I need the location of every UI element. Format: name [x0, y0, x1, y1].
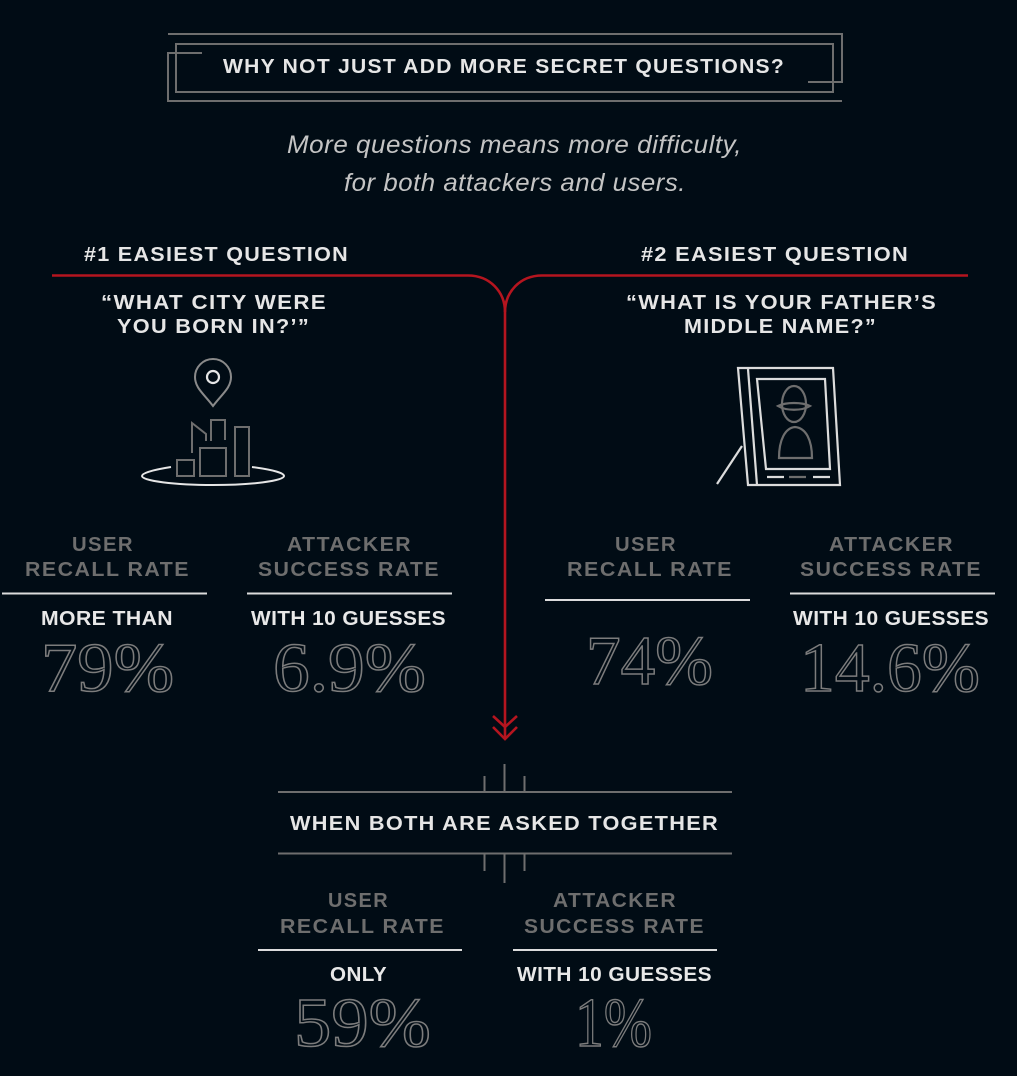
icon: picture frame portrait [717, 368, 840, 485]
stat: attacker success rate 14.6%: WITH 10 GUESSES [793, 608, 989, 630]
stat: attacker success rate 1% [513, 890, 717, 1061]
header banner [168, 34, 842, 101]
red branching arrow [52, 276, 968, 739]
subtitle: More questions means more difficulty, [287, 131, 742, 159]
stat: attacker success rate 1%: SUCCESS RATE [524, 916, 705, 938]
panel: easiest question 2 [545, 244, 995, 707]
stat: user recall rate 79% [2, 534, 207, 707]
stat: user recall rate 59%: ONLY [330, 964, 387, 986]
stat: user recall rate 79%: RECALL RATE [25, 559, 190, 581]
question: father's middle name [626, 292, 937, 338]
stat: attacker success rate 1%: 1% [575, 984, 652, 1061]
heading: #1 easiest question: #1 EASIEST QUESTION [84, 244, 349, 266]
title: WHY NOT JUST ADD MORE SECRET QUESTIONS? [223, 56, 785, 78]
stat: attacker success rate 1%: ATTACKER [553, 890, 677, 912]
subtitle: for both attackers and users. [344, 169, 686, 197]
stat: user recall rate 79%: MORE THAN [41, 608, 173, 630]
stat: user recall rate 74%: USER [615, 534, 677, 556]
stat: attacker success rate 6.9% [247, 534, 452, 707]
stat: attacker success rate 14.6%: ATTACKER [829, 534, 954, 556]
question: father's middle name: MIDDLE NAME?” [684, 316, 877, 338]
panel: both questions together [258, 764, 732, 1061]
stat: attacker success rate 1%: WITH 10 GUESSES [517, 964, 712, 986]
icon: map pin over city [142, 359, 284, 485]
question: city born in: “WHAT CITY WERE [101, 292, 327, 314]
stat: attacker success rate 14.6%: SUCCESS RATE [800, 559, 982, 581]
question: city born in: YOU BORN IN?’” [117, 316, 310, 338]
stat: user recall rate 79%: USER [72, 534, 134, 556]
stat: user recall rate 74% [545, 534, 750, 700]
heading: #2 easiest question: #2 EASIEST QUESTION [641, 244, 909, 266]
stat: attacker success rate 6.9%: 6.9% [273, 629, 426, 707]
stat: attacker success rate 6.9%: WITH 10 GUESSES [251, 608, 446, 630]
stat: attacker success rate 14.6% [790, 534, 995, 707]
stat: attacker success rate 14.6%: 14.6% [800, 630, 980, 707]
stat: attacker success rate 6.9%: ATTACKER [287, 534, 412, 556]
stat: attacker success rate 6.9%: SUCCESS RATE [258, 559, 440, 581]
stat: user recall rate 59% [258, 890, 462, 1061]
stat: user recall rate 74%: RECALL RATE [567, 559, 733, 581]
question: city born in [101, 292, 327, 338]
heading: when both are asked together [278, 764, 732, 883]
heading: when both are asked together: WHEN BOTH ARE ASKED TOGETHER [290, 813, 719, 835]
subtitle [287, 131, 742, 197]
stat: user recall rate 59%: RECALL RATE [280, 916, 445, 938]
question: father's middle name: “WHAT IS YOUR FATHER’S [626, 292, 937, 314]
stat: user recall rate 74%: 74% [586, 623, 713, 700]
stat: user recall rate 59%: USER [328, 890, 389, 912]
stat: user recall rate 59%: 59% [294, 984, 431, 1061]
panel: easiest question 1 [2, 244, 452, 707]
stat: user recall rate 79%: 79% [41, 629, 174, 707]
